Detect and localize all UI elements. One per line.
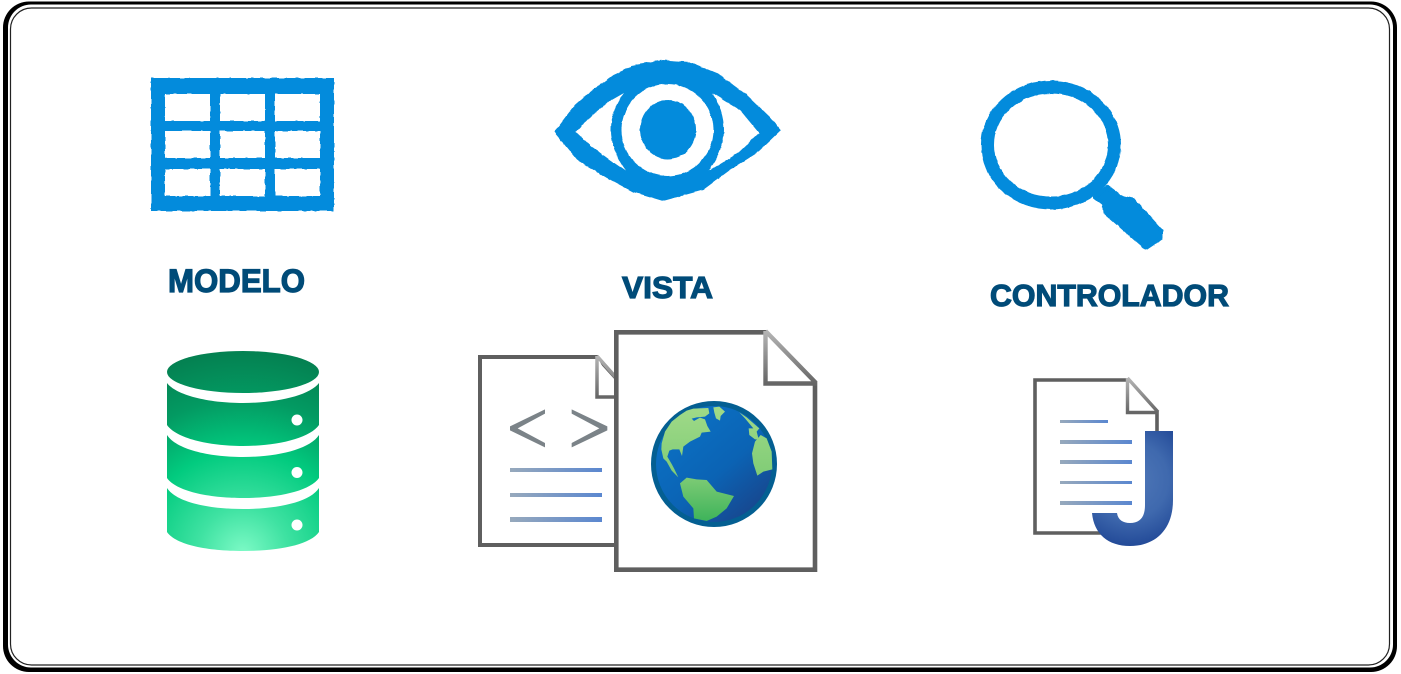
code text lines	[510, 468, 602, 522]
icon: database	[167, 351, 319, 551]
icon: Java document	[1035, 378, 1173, 546]
back document outline	[480, 357, 616, 545]
java document text lines	[1060, 420, 1132, 505]
java document outline	[1035, 380, 1157, 533]
letter J	[1092, 431, 1173, 546]
globe	[654, 404, 774, 524]
front document fold	[766, 331, 817, 384]
globe ocean	[654, 404, 774, 524]
icon: magnifying glass (controlador)	[988, 87, 1161, 248]
java document fold	[1128, 378, 1158, 412]
icon: web document with globe	[616, 331, 817, 570]
icon: eye (vista)	[554, 60, 781, 201]
database indicator lights	[292, 414, 302, 530]
icon: table (modelo)	[151, 78, 334, 211]
code brackets	[510, 409, 607, 447]
database middle tier	[167, 435, 319, 498]
heading: MODELO: MODELO	[168, 263, 305, 299]
heading: CONTROLADOR: CONTROLADOR	[990, 278, 1229, 313]
globe continents	[661, 407, 772, 521]
database top disc	[167, 351, 319, 393]
heading: VISTA: VISTA	[622, 270, 713, 305]
icon: HTML code document	[480, 356, 618, 545]
back document fold	[597, 356, 618, 397]
database lower tier	[167, 488, 319, 551]
front document outline	[616, 332, 815, 570]
database upper tier	[167, 383, 319, 446]
